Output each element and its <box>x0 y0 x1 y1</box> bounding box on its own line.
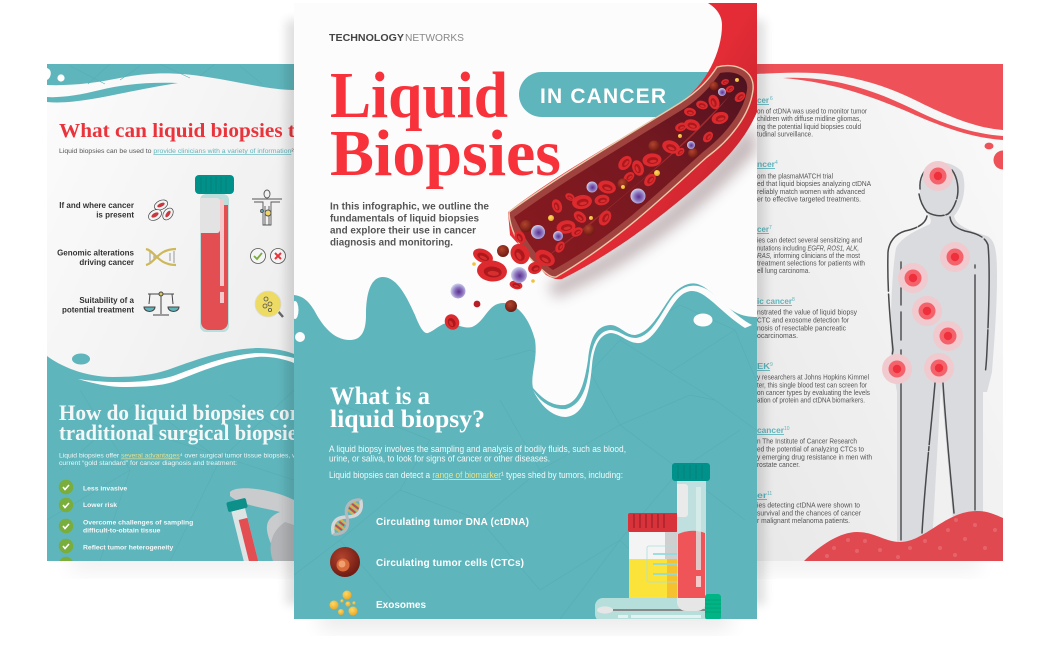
text column: case studies: ter, this single blood test can screen for <box>757 380 868 390</box>
vessel shadow <box>548 122 757 298</box>
icon: exosomes <box>330 590 358 616</box>
top red wave <box>757 64 1012 170</box>
icon: human body <box>252 190 282 225</box>
text column: case studies: nutations including EGFR, ROS1, ALK, <box>757 244 859 252</box>
text column: case studies: ed that liquid biopsies analyzing ctDNA <box>757 179 871 188</box>
text column: case studies: treatment selections for patients with <box>757 258 865 268</box>
text column: case studies: 8 <box>792 297 795 303</box>
text column: case studies: rostate cancer. <box>757 460 800 469</box>
body text: A liquid biopsy involves the sampling and analysis of bodily fluids, such as blood, <box>329 444 626 454</box>
lower teal section <box>47 348 294 561</box>
intro text: and explore their use in cancer <box>330 224 476 236</box>
vessel opening rim <box>509 66 753 277</box>
text column: case studies: n The Institute of Cancer Research <box>757 436 857 446</box>
feature labels: If and where cancer <box>59 201 134 210</box>
text column: case studies: ies detecting ctDNA were shown to <box>757 500 860 510</box>
text column: case studies: ell lung carcinoma. <box>757 266 810 275</box>
feature labels: potential treatment <box>62 306 134 314</box>
top teal wave <box>47 64 294 102</box>
icon: tumor cell <box>330 547 360 577</box>
text column: case studies: cancer <box>757 425 785 435</box>
heading: how do liquid biopsies compare: How do liquid biopsies cor <box>59 400 299 425</box>
intro text: fundamentals of liquid biopsies <box>330 212 479 224</box>
heading: what is a liquid biopsy: liquid biopsy? <box>330 406 485 433</box>
biopsy device illustration <box>226 488 294 561</box>
feature labels <box>57 201 135 314</box>
flowing streak <box>545 95 730 258</box>
body text <box>329 444 626 480</box>
text column: case studies: ed the potential of analyzing CTCs to <box>757 444 864 454</box>
text column: case studies: RAS, informing clinicians of the most <box>757 251 860 260</box>
feature labels: driving cancer <box>79 258 134 267</box>
text column: case studies: EK <box>757 361 771 371</box>
icon: magnifier <box>255 291 283 317</box>
text column: case studies: 11 <box>767 491 772 497</box>
text column: case studies: CTC and exosome detection for <box>757 316 850 324</box>
icon: scales <box>144 292 179 315</box>
comparison intro text <box>59 452 297 467</box>
biomarker labels: Exosomes <box>376 600 426 611</box>
heading: what is a liquid biopsy <box>330 383 485 433</box>
icon: blood cells <box>148 200 174 221</box>
text column: case studies: cer <box>757 95 770 105</box>
bottom red hill <box>803 511 1003 562</box>
teal wave section <box>292 277 757 619</box>
text column: case studies: nstrated the value of liquid biopsy <box>757 308 857 316</box>
page shadows <box>70 545 980 630</box>
comparison intro text: Liquid biopsies offer several advantages ⁴ over surgical tumor tissue biopsies, w <box>59 452 297 460</box>
text column: case studies <box>757 95 872 525</box>
icon: dna <box>146 249 176 265</box>
text column: case studies: reliably match women with advanced <box>757 187 865 196</box>
text column: case studies: ic cancer <box>757 296 793 306</box>
heading: how do liquid biopsies compare <box>59 404 294 444</box>
text column: case studies: y emerging drug resistance in men with <box>757 452 872 462</box>
advantages checklist: Less invasive <box>83 486 127 492</box>
vessel tube <box>508 3 757 279</box>
heading: what is a liquid biopsy: What is a <box>330 383 430 410</box>
title: Biopsies <box>330 117 561 190</box>
text column: case studies: ncer <box>757 159 776 169</box>
intro text: Liquid biopsies can be used to provide clinicians with a variety of information ², i <box>59 148 299 155</box>
tray <box>595 598 706 619</box>
text column: case studies: om the plasmaMATCH trial <box>757 172 833 180</box>
text column: case studies: er <box>757 490 768 500</box>
advantages checklist: Reflect tumor heterogeneity <box>83 544 173 552</box>
body text: Liquid biopsies can detect a range of biomarker¹ types shed by tumors, including: <box>329 470 623 480</box>
feature labels: Suitability of a <box>79 296 135 305</box>
body text: urine, or saliva, to look for signs of cancer or other diseases. <box>329 454 550 464</box>
icon: blood tube <box>195 175 234 332</box>
icon: check and cross <box>250 248 286 264</box>
pill: in cancer <box>519 72 708 117</box>
icon: dna helix <box>331 498 363 536</box>
text column: case studies: on cancer types by evaluating the levels <box>757 388 870 397</box>
title <box>331 72 560 189</box>
vessel lumen <box>514 72 747 270</box>
text column: case studies: 7 <box>769 225 772 231</box>
text column: case studies: cer <box>757 224 770 234</box>
text column: case studies: survival and the chances of cancer <box>757 508 862 518</box>
text column: case studies: ing the potential liquid biopsies could <box>757 122 861 131</box>
panel: centre page <box>292 3 757 622</box>
intro text <box>330 200 489 248</box>
specimen jar <box>628 513 678 599</box>
advantages checklist <box>58 480 193 561</box>
heading: what can liquid biopsies: What can liquid biopsies t <box>59 120 295 142</box>
text column: case studies: tudinal surveillance. <box>757 130 813 138</box>
advantages checklist: Lower risk <box>83 502 117 509</box>
shadow of centre page on side pages <box>286 20 765 605</box>
escaped blood cells <box>442 240 544 332</box>
biomarker labels: Circulating tumor cells (CTCs) <box>376 558 524 569</box>
panel: right page <box>757 64 1012 562</box>
pill: in cancer: IN CANCER <box>540 85 666 108</box>
text column: case studies: 9 <box>770 362 773 368</box>
intro text: In this infographic, we outline the <box>330 200 489 212</box>
blood cells <box>512 78 747 270</box>
panel: left page <box>47 64 299 572</box>
biomarker labels <box>376 517 529 611</box>
biomarker labels: Circulating tumor DNA (ctDNA) <box>376 517 529 528</box>
feature labels: Genomic alterations <box>57 248 135 258</box>
logo <box>329 34 464 41</box>
comparison intro text: current “gold standard” for cancer diagnosis and treatment: <box>59 460 237 467</box>
feature labels: is present <box>96 210 134 220</box>
logo: TECHNOLOGY <box>329 32 404 44</box>
title: Liquid <box>330 59 508 132</box>
logo: NETWORKS <box>405 32 464 44</box>
heading: how do liquid biopsies compare: traditional surgical biopsie <box>59 420 297 445</box>
intro text: diagnosis and monitoring. <box>330 236 453 248</box>
illustration: sample containers <box>595 463 721 622</box>
text column: case studies: er to effective targeted treatments. <box>757 194 861 204</box>
body figure <box>888 162 997 545</box>
text column: case studies: ies can detect several sensitizing and <box>757 236 862 244</box>
text column: case studies: on of ctDNA was used to monitor tumor <box>757 106 868 116</box>
text column: case studies: 10 <box>784 426 790 432</box>
advantages checklist: difficult-to-obtain tissue <box>83 528 161 534</box>
blood tube <box>672 463 710 611</box>
text column: case studies: ation of protein and ctDNA biomarkers. <box>757 396 865 404</box>
blood vessel illustration <box>442 3 757 332</box>
text column: case studies: r malignant melanoma patients. <box>757 516 850 525</box>
text column: case studies: 4 <box>775 160 778 166</box>
text column: case studies: y researchers at Johns Hopkins Kimmel <box>757 372 869 382</box>
tumor markers <box>882 161 970 384</box>
green cap <box>705 594 721 620</box>
advantages checklist: Overcome challenges of sampling <box>83 520 193 526</box>
text column: case studies: 6 <box>770 96 773 102</box>
text column: case studies: ocarcinomas. <box>757 331 798 340</box>
text column: case studies: nosis of resectable pancreatic <box>757 324 846 332</box>
text column: case studies: children with diffuse midline gliomas, <box>757 114 861 123</box>
